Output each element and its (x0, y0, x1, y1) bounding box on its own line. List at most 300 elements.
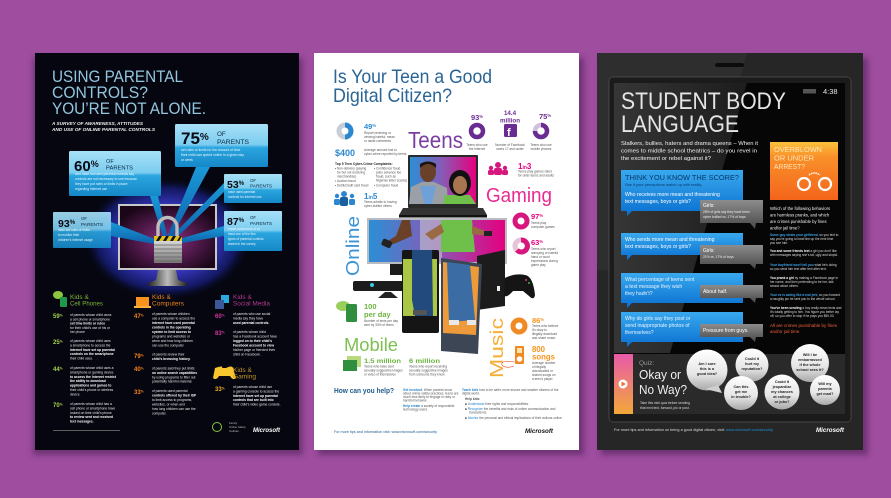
online stats: • Debit/credit card fraud (335, 184, 369, 188)
bubble: jeopardize: at college (773, 395, 791, 399)
stat text (233, 385, 281, 406)
play tab (614, 354, 633, 414)
bubble: parents get mad: Will my (818, 382, 833, 386)
quiz card 4: themselves? (625, 330, 654, 336)
callout: 75% (175, 124, 268, 167)
column: kids and gaming (213, 366, 281, 406)
online stats: or racist comments (364, 139, 391, 143)
bubble: parents get mad: parents (818, 387, 832, 391)
quiz band: No Way? (639, 382, 687, 397)
stat text: controls in the operating (152, 326, 191, 330)
intro text: the excitement or rebel against it? (621, 156, 711, 162)
callout: 60%: 60 (74, 158, 91, 175)
stat text: internet have set up parental (70, 348, 115, 352)
callout: 60%: regarding Internet use (75, 187, 107, 191)
poster shadows (33, 58, 868, 455)
online stats: 49 (364, 122, 372, 131)
orange panel: overblown or under arrest: ARREST? (774, 164, 805, 171)
quiz card 2: Who sends more mean and threatening (625, 237, 715, 243)
bubble: jeopardize (764, 374, 800, 410)
quiz band: Take this mini-quiz before sending (640, 401, 690, 405)
column: kids and cell phones: 44 (53, 367, 60, 373)
quiz card 1: cyber bullied vs. 17% of boys (703, 215, 746, 219)
stat text: of parents used parental (152, 389, 188, 393)
gaming stats: 63 (531, 238, 539, 247)
teens stats: Teens who use (530, 143, 552, 147)
stat text: a cell phone or smartphone (70, 318, 110, 322)
intro text: Stalkers, bullies, haters and drama queens – When it (621, 141, 758, 147)
title: Is Your Teen a Good (333, 66, 492, 88)
online stats (334, 122, 407, 276)
callout: 53%: % (239, 181, 245, 187)
callout: 53%: controls for Internet use (228, 195, 262, 199)
callout: 60%: who have not used parental controls say (75, 172, 134, 176)
heading: mobile: Mobile (344, 335, 398, 355)
column: kids and computers (134, 294, 197, 416)
bubble: get me in trouble: get me (735, 390, 747, 394)
figure: boy's arm and controller (381, 220, 412, 249)
stat text: of parents who use social (233, 312, 270, 316)
stat text: of parents whose child uses a (70, 366, 114, 370)
music stats: 800 (532, 345, 546, 354)
donut: 93%: the Internet (469, 147, 485, 151)
column: kids and computers: % (141, 354, 144, 358)
column: kids and computers: 33 (134, 390, 141, 396)
music stats: and share music (532, 336, 556, 340)
callout: 87%: % (239, 218, 245, 224)
online stats: cyber-bullied others (364, 204, 392, 208)
quiz card 1: See if your perceptions match up with reality. (625, 182, 702, 187)
mobile stats: sent by 33% of teens (364, 323, 394, 327)
music stats: it's okay to (532, 328, 547, 332)
stat text: device. (70, 392, 81, 396)
column: kids and cell phones: % (60, 340, 63, 344)
stat text: by using programs to filter out (152, 376, 196, 380)
mobile stats: or video of themselves (364, 372, 396, 376)
behaviors text: You've been sending a boy really mean texts and (770, 306, 842, 310)
behaviors text: her name, and then pretending to be her, talk (770, 280, 834, 284)
heading: Kids & (152, 294, 171, 301)
quiz card 1: 25% of girls say they have been (703, 210, 750, 214)
title (621, 88, 786, 138)
how can you help: Teach kids how to be safer, more secure and smarter citizens of the (462, 388, 559, 392)
behaviors text: All are crimes punishable by fines (770, 323, 838, 328)
icon: facebook: million (500, 118, 520, 124)
footer: For more tips and information on being a good digital citizen, visit: www.microsoft.com/security (614, 428, 773, 432)
column: kids and cell phones: 70 (53, 403, 60, 409)
column: kids and computers: 40 (134, 367, 141, 373)
behaviors text: a naughty pic he sent you to the whole school. (770, 297, 836, 301)
music stats: of illegally (532, 365, 546, 369)
online stats: Top 5 Teen Cyber-Crime Complaints: (335, 162, 393, 166)
icon: people (334, 191, 355, 206)
status bar (803, 87, 838, 96)
stat text: use a computer to access the (152, 316, 195, 320)
mobile stats: Teens who have sent (364, 364, 394, 368)
music stats (487, 316, 558, 381)
gaming stats: game play (531, 263, 546, 267)
callout: 93%: to monitor their (58, 233, 80, 237)
stat text: websites, or when and (152, 402, 185, 406)
donut: 49% (339, 125, 351, 137)
bubble: embarrassed: Will I be (803, 353, 817, 357)
online stats: (also advance fee (376, 170, 401, 174)
icon: padlock (154, 218, 182, 263)
intro text: comes to middle school theatrics – do you revel in (621, 148, 757, 154)
donut: 97% (515, 215, 527, 227)
television with teens (367, 218, 507, 275)
logo: family online safety institute: Institute (229, 429, 239, 433)
gaming stats: Teens play (531, 221, 547, 225)
stat text: controls on the smartphone (70, 352, 114, 356)
quiz card 3: they hadn't? (625, 291, 653, 297)
title: CONTROLS? (52, 83, 148, 102)
how can you help: much less likely to engage in risky or (403, 395, 456, 399)
gaming stats: expressions during (531, 259, 558, 263)
behaviors text: and/or jail time. (770, 329, 801, 334)
callout: 93%: have set rules or limits (58, 228, 90, 232)
quiz band (614, 344, 845, 414)
teens stats (408, 110, 552, 153)
gaming stats: annoying or hateful (531, 251, 558, 255)
stat text: of parents whose child (233, 330, 266, 334)
teens stats: % (547, 113, 551, 118)
bubble: hurt my reputation: reputation? (742, 367, 763, 371)
title: LANGUAGE (621, 111, 739, 138)
quiz card 2: text messages, boys or girls? (625, 244, 691, 250)
status bar: 4:38 (823, 87, 838, 96)
icon: speaker slot (715, 63, 744, 67)
orange panel: overblown or under arrest: OR UNDER (774, 156, 814, 162)
teens stats: mobile phones (531, 147, 552, 151)
gaming stats: hand or word (531, 255, 550, 259)
title: USING PARENTAL (52, 67, 183, 86)
stat text: cell phone or smartphone have (70, 406, 115, 410)
mobile stats: 6 million (409, 358, 440, 365)
heading: Kids & (233, 294, 252, 301)
mobile stats: Teens who report receiving (409, 364, 447, 368)
bubble: am i sure (686, 350, 728, 393)
callout: 75%: PARENTS (217, 139, 249, 146)
column: kids and computers: 47 (134, 314, 141, 320)
title (52, 67, 206, 118)
quiz card 3: About half. (703, 289, 727, 295)
stat text: computer. (152, 412, 167, 416)
stat text: Facebook account to view (233, 344, 274, 348)
panel: digital citizen poster (314, 53, 579, 450)
icon: game controller (213, 366, 236, 379)
mobile stats (336, 301, 448, 376)
callout: 87%: OF (250, 215, 256, 220)
callout: 93%: OF (81, 216, 87, 221)
game console and controller (477, 250, 535, 310)
heading (70, 294, 104, 308)
bubble: embarrassed: school sees it? (796, 368, 824, 372)
bubble: get me in trouble: Can this (734, 385, 748, 389)
gaming stats: 1in3 (518, 162, 532, 171)
mobile stats: from someone they know (409, 372, 445, 376)
mobile stats: 100 (364, 302, 377, 311)
figure: girl in green (425, 220, 492, 252)
online stats: fraud, such as (376, 174, 396, 178)
mobile stats: sexually suggestive images (364, 368, 403, 372)
music stats: songs (532, 352, 556, 362)
stat text: child on Facebook. (233, 352, 261, 356)
stat text: the ability to download (70, 379, 106, 383)
icon: facebook: Number of Facebook (495, 143, 525, 147)
callout: 87%: least one of the five (228, 232, 256, 236)
bubble: hurt my reputation (736, 348, 768, 382)
quiz card 3: a text message they wish (625, 284, 682, 290)
panel: parental controls poster (35, 53, 299, 450)
title: YOU’RE NOT ALONE. (52, 99, 206, 118)
music stats: Average number (532, 361, 556, 365)
callout: 53%: 53 (227, 179, 239, 191)
stat text: smartphone or gaming device (70, 370, 114, 374)
callout: 60%: OF (106, 159, 114, 165)
stat text: of parents whose child owns (70, 313, 112, 317)
gaming stats: for older teens and adults (518, 174, 554, 178)
heading: Gaming (233, 374, 256, 380)
column: kids and cell phones (53, 291, 117, 424)
online stats: for but not receiving (337, 170, 365, 174)
stat text: of parents whose child has a (70, 402, 112, 406)
stat text: on online search capabilities (152, 371, 197, 375)
column: kids and cell phones: 25 (53, 340, 60, 346)
behaviors text: you see him. (770, 241, 788, 245)
bubble: embarrassed: if the whole (800, 363, 820, 367)
logo: family online safety institute: Family (229, 421, 238, 425)
figure: girl (443, 170, 476, 204)
callout: 93%: children's Internet usage (58, 238, 93, 242)
mobile stats: sexually suggestive images (409, 368, 448, 372)
logo: family online safety institute (212, 421, 246, 433)
column: kids and gaming: % (222, 386, 225, 390)
callout: 75%: or week (181, 158, 193, 162)
gaming stats: 97 (531, 212, 539, 221)
stat text: of parents whose child use (233, 385, 272, 389)
music stats: a teen's player (532, 377, 554, 381)
intro text (621, 141, 758, 162)
screen (609, 77, 851, 422)
gaming stats: Teens play games rated (518, 170, 552, 174)
online stats: viewing hateful, mean (364, 135, 395, 139)
title (333, 66, 492, 107)
callout beams (111, 167, 224, 245)
stat text: logged on to their child's (233, 339, 272, 343)
icon: social tiles (215, 295, 229, 309)
behaviors text: You and some friends text a girl you don't like (770, 249, 837, 253)
music stats: 86 (532, 316, 540, 325)
how can you help (334, 386, 563, 420)
column: kids and computers: % (141, 390, 144, 394)
bubble: parents get mad: get mad? (817, 392, 834, 396)
online stats: • Auction fraud (335, 179, 356, 183)
online stats: Teens admits to having (364, 200, 397, 204)
stat text: text messages. (70, 420, 94, 424)
icon: facebook: users 17 and under (496, 147, 525, 151)
subtitle: A SURVEY OF AWARENESS, ATTITUDES (51, 121, 143, 126)
heading: Kids & (233, 367, 252, 374)
bubble: parents get mad (810, 375, 840, 405)
online stats: cyber-crime reported by teens (364, 152, 407, 156)
behaviors text: You prank a girl by making a Facebook page in (770, 276, 838, 280)
column: kids and cell phones: % (60, 402, 63, 406)
stat text: their child's phone or wireless (70, 388, 113, 392)
gaming stats: computer games (531, 225, 555, 229)
laptop with teens (399, 155, 487, 218)
column: kids and computers: 79 (134, 354, 141, 360)
icon: facebook: 14.4 (504, 110, 517, 117)
callout: 75%: % (200, 132, 209, 143)
heading: online: Online (343, 216, 363, 276)
behaviors text: with messages saying she's fat, ugly and stupid. (770, 253, 838, 257)
behaviors text: smack about others. (770, 284, 799, 288)
stat text: a smartphone to access the (70, 344, 111, 348)
stat text: looked on their child's phone (70, 411, 112, 415)
behaviors text: Your ex is acting like a real jerk, so you forward (770, 293, 840, 297)
callout: 60%: % (91, 159, 99, 169)
bubble: embarrassed (791, 344, 829, 382)
mobile stats: Number of texts per day (364, 319, 398, 323)
donut: 63% (515, 240, 527, 252)
bubble: am i sure: Am I sure (698, 362, 716, 366)
bubble: get me in trouble: in trouble? (731, 395, 751, 399)
stat text: of parents review their (152, 352, 185, 356)
icon: text phone (336, 301, 357, 322)
quiz card 3: What percentage of teens sent (625, 277, 695, 283)
title: STUDENT BODY (621, 88, 786, 115)
how can you help: harmful behavior. (403, 398, 428, 402)
callout: 60%: PARENTS (106, 166, 133, 172)
callout: 60% (69, 151, 161, 196)
stat text: her phone (70, 330, 85, 334)
callout: 75%: OF (217, 131, 226, 138)
heading: Kids & (70, 294, 89, 301)
how can you help: Get involved. When parents know (403, 388, 453, 392)
stat text: controls that are built into (233, 398, 274, 402)
monitor (118, 204, 217, 286)
quiz card 1: text messages, boys or girls? (625, 199, 691, 205)
column: kids and cell phones: % (60, 366, 63, 370)
subtitle (51, 121, 155, 132)
behaviors text: and/or jail time? (770, 226, 800, 230)
gaming stats (486, 162, 558, 267)
stat text: a gaming console to access the (233, 390, 279, 394)
behaviors text (770, 206, 842, 334)
phone: green screen (402, 250, 439, 333)
donut: 93%: 93 (471, 113, 479, 122)
gaming stats: Teens who report (531, 247, 556, 251)
quiz card 1: THINK YOU KNOW THE SCORE? (625, 173, 739, 182)
stat text: potentially harmful material. (152, 380, 192, 384)
footnote (53, 429, 120, 432)
stat text: set time limits or rules (70, 322, 105, 326)
stat text: to access the Internet restrict (70, 375, 117, 379)
bubble: embarrassed: embarrassed (798, 358, 823, 362)
donut: 93%: Teens who use (466, 143, 488, 147)
music stats: illegally download (532, 332, 557, 336)
column: kids and cell phones: 59 (53, 314, 60, 320)
heading: teens: Teens (408, 127, 463, 153)
stat text: to limit access to programs, (152, 398, 192, 402)
behaviors text: Your boyfriend won't tell you what he's doing (770, 263, 837, 267)
bubble: jeopardize: Could it (775, 380, 790, 384)
how can you help: digital world. (462, 392, 480, 396)
stat text (70, 313, 117, 424)
stat text: controls offered by their ISP (152, 394, 197, 398)
mobile stats: 1.5 million (364, 358, 401, 365)
behaviors text: off, so you offer to stop if he pays you $50.00. (770, 314, 834, 318)
quiz card 1 (621, 170, 763, 229)
quiz card 4: send inappropriate photos of (625, 323, 690, 329)
subtitle: AND USE OF ONLINE PARENTAL CONTROLS (51, 127, 155, 132)
stat text: their child uses. (70, 356, 93, 360)
behaviors text: so you send him text after text after text. (770, 267, 827, 271)
behaviors text: Which of the following behaviors (770, 206, 830, 211)
logo: family online safety institute: Online Safety (229, 425, 246, 429)
logo: microsoft: Microsoft (525, 428, 554, 435)
music stats: % (540, 317, 544, 322)
donut: 93% (466, 113, 488, 151)
column: kids and computers: % (141, 314, 144, 318)
column: kids and cell phones: % (60, 314, 63, 318)
bubble: jeopardize: jeopardize (772, 385, 791, 389)
heading: Social Media (233, 300, 270, 308)
column: kids and social media: % (222, 330, 225, 334)
online stats: merchandise) (337, 174, 356, 178)
stat text: to review sent and received (70, 415, 113, 419)
column: kids and social media: % (222, 314, 225, 318)
heading: gaming: Gaming (486, 185, 552, 207)
behaviors text: say you're going to beat him up the next time (770, 237, 834, 241)
behaviors text: Some guy steals your girlfriend, so you text to (770, 233, 839, 237)
heading (233, 294, 270, 308)
quiz card 3 (621, 273, 763, 308)
behaviors text: are crimes punishable by fines (770, 219, 827, 224)
callout: 53%: have used parental (228, 190, 255, 194)
icon: laptop (134, 297, 151, 308)
quiz card 1: Who receives more mean and threatening (625, 192, 720, 198)
donut: 75% (535, 125, 547, 137)
heading: music: Music (487, 318, 507, 378)
stat text: programs and websites or (152, 334, 191, 338)
column: kids and gaming: 33 (215, 387, 222, 393)
callout: 93%: PARENTS (81, 222, 103, 227)
stat text: used parental controls. (233, 321, 269, 325)
callout: 87%: PARENTS (250, 221, 272, 226)
behaviors text: it's totally getting to him. You figure you better lay (770, 310, 839, 314)
title: Digital Citizen? (333, 85, 452, 107)
gaming stats: % (539, 213, 543, 218)
icon: photos (343, 356, 361, 371)
callout: 87% (224, 211, 282, 251)
mobile stats: per day (364, 310, 392, 319)
stat text: how long children can use the (152, 407, 196, 411)
teens stats: 75 (539, 112, 547, 121)
stat text (233, 312, 277, 356)
stat text: can use the computer. (152, 344, 185, 348)
online stats: • Computer fraud (374, 184, 398, 188)
footer: For more tips and information visit: www.microsoft.com/security (334, 429, 437, 434)
online stats: • Non-delivery (paying (335, 166, 366, 170)
stat text: applications and games to (70, 384, 111, 388)
bubble: hurt my reputation: Could it (745, 357, 760, 361)
stat text: of parents whose child uses (70, 339, 111, 343)
icon: chat and phone (53, 291, 67, 307)
icon: facebook: f (507, 127, 511, 139)
icon: facebook (495, 110, 525, 151)
